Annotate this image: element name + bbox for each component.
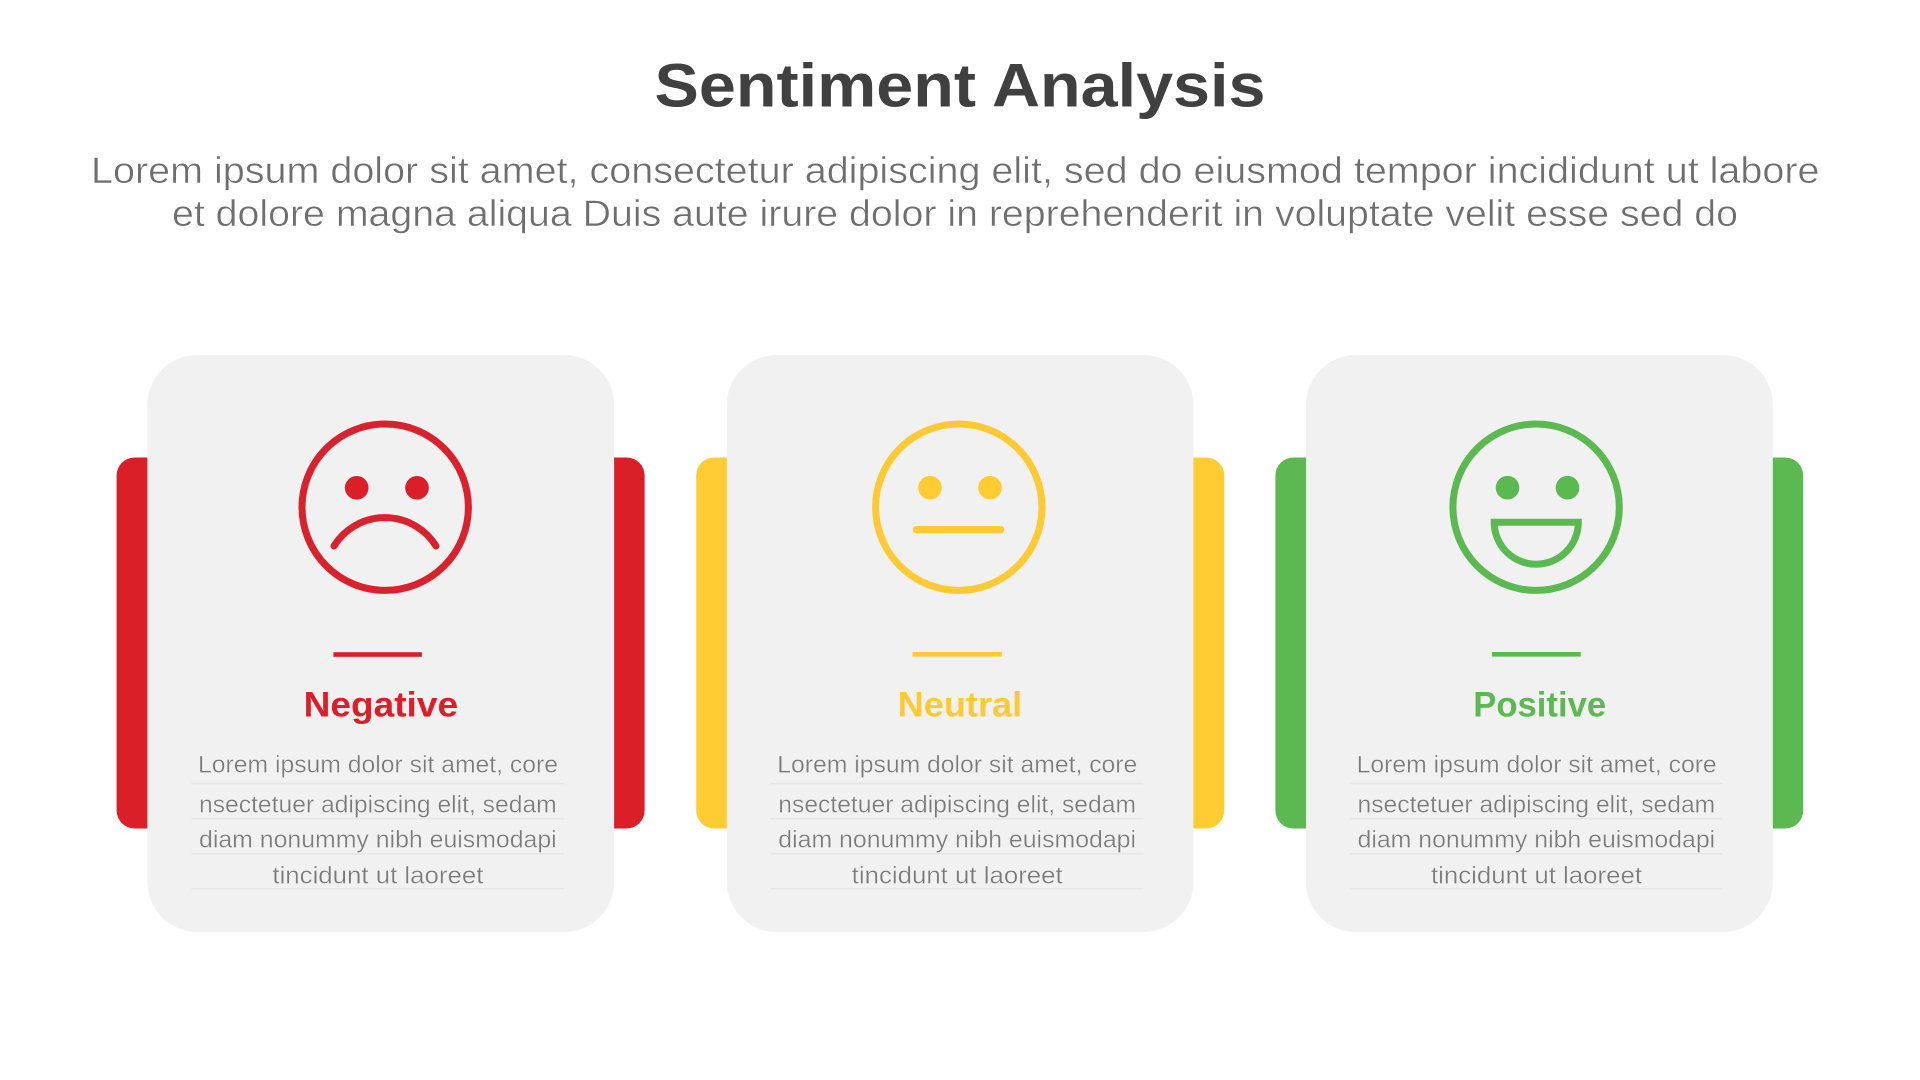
body text: positive: diam nonummy nibh euismodapi	[1358, 827, 1715, 854]
side tabs: negative	[117, 458, 645, 828]
card: neutral	[727, 355, 1193, 932]
heading: positive: Positive	[1473, 686, 1606, 725]
body text: neutral	[771, 752, 1143, 889]
body text: negative: Lorem ipsum dolor sit amet, core	[198, 752, 558, 779]
body text: positive: Lorem ipsum dolor sit amet, core	[1357, 752, 1717, 779]
body text: negative: nsectetuer adipiscing elit, sedam	[199, 792, 557, 819]
body text: negative: tincidunt ut laoreet	[272, 862, 484, 889]
icon: sad face	[302, 424, 468, 590]
subtitle text block	[91, 150, 1820, 234]
title: Sentiment Analysis	[654, 52, 1266, 120]
divider: negative	[333, 652, 422, 657]
heading: neutral: Neutral	[898, 686, 1022, 725]
body text: neutral: diam nonummy nibh euismodapi	[778, 827, 1136, 854]
panel: positive	[1275, 355, 1803, 932]
side tabs: positive	[1275, 458, 1803, 828]
card: positive	[1306, 355, 1773, 932]
subtitle text block: et dolore magna aliqua Duis aute irure dolor in reprehenderit in voluptate velit esse sed do	[172, 193, 1738, 234]
body text: negative: diam nonummy nibh euismodapi	[199, 827, 557, 854]
body text: positive: nsectetuer adipiscing elit, sedam	[1358, 792, 1715, 819]
body text: neutral: tincidunt ut laoreet	[852, 862, 1063, 889]
panel: neutral	[696, 355, 1224, 932]
card: negative	[147, 355, 614, 932]
divider: positive	[1492, 652, 1581, 657]
body text: negative	[191, 752, 564, 889]
body text: positive: tincidunt ut laoreet	[1431, 862, 1642, 889]
icon: happy face	[1453, 424, 1619, 590]
side tabs: neutral	[696, 458, 1224, 828]
body text: positive	[1350, 752, 1723, 889]
panel: negative	[117, 355, 645, 932]
body text: neutral: Lorem ipsum dolor sit amet, core	[777, 752, 1137, 779]
body text: neutral: nsectetuer adipiscing elit, sedam	[778, 792, 1136, 819]
heading: negative: Negative	[304, 686, 458, 725]
subtitle text block: Lorem ipsum dolor sit amet, consectetur adipiscing elit, sed do eiusmod tempor incididunt ut labore	[91, 150, 1820, 191]
icon: neutral face	[876, 424, 1042, 590]
divider: neutral	[912, 652, 1002, 657]
